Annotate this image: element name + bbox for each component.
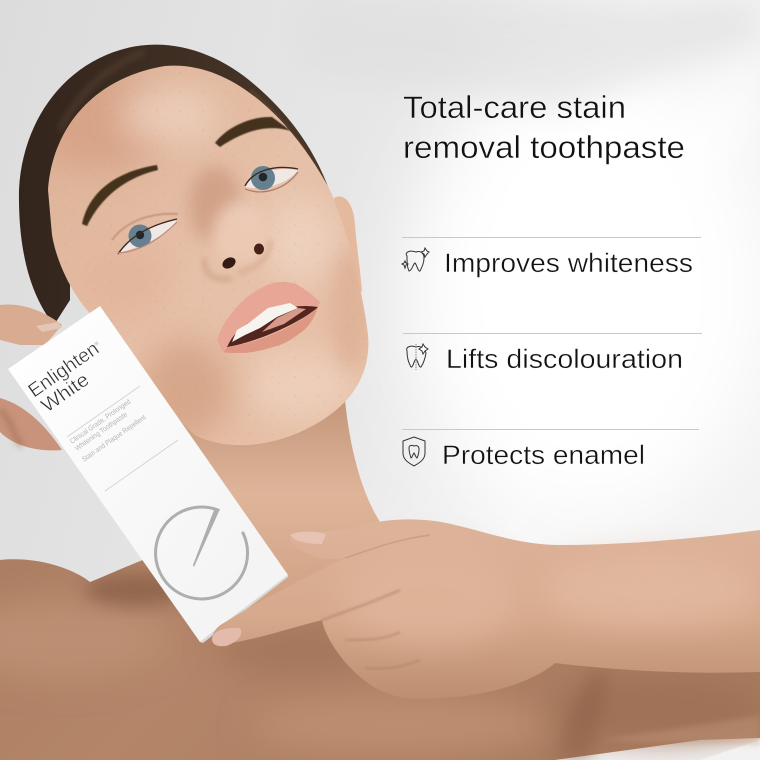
benefit: improves whiteness bbox=[402, 238, 701, 278]
ear bbox=[334, 197, 362, 292]
neck bbox=[130, 400, 382, 610]
icon: shield with tooth bbox=[403, 437, 425, 466]
benefit: lifts discolouration: Lifts discolouration bbox=[446, 344, 683, 374]
product box bbox=[8, 306, 288, 643]
pointing hand and arm bbox=[212, 519, 760, 699]
heading: Total-care stain bbox=[403, 89, 626, 125]
nose bbox=[205, 216, 270, 279]
benefit: improves whiteness: Improves whiteness bbox=[444, 248, 693, 278]
heading: removal toothpaste bbox=[403, 129, 685, 165]
heading bbox=[403, 89, 685, 165]
hair bbox=[19, 45, 330, 325]
face bbox=[48, 66, 368, 445]
box descriptor: Whitening Toothpaste bbox=[73, 410, 129, 453]
eyebrow right bbox=[215, 117, 291, 147]
eyelid crease left bbox=[112, 214, 178, 240]
product box: ® bbox=[93, 340, 100, 348]
box title: White bbox=[37, 369, 93, 417]
benefit: protects enamel: Protects enamel bbox=[442, 440, 645, 470]
benefit: lifts discolouration bbox=[403, 334, 702, 374]
hand behind box: left fingers bbox=[0, 305, 62, 450]
icon: half-shaded tooth bbox=[407, 344, 428, 370]
box logo bbox=[156, 507, 248, 599]
icon: tooth with sparkles bbox=[402, 248, 429, 271]
lips bbox=[217, 282, 320, 353]
fingernails bbox=[212, 628, 241, 646]
box descriptor: Clinical Grade, Prolonged bbox=[68, 397, 132, 446]
box title: Enlighten bbox=[24, 338, 103, 402]
box descriptor: Stain and Plaque Repellent bbox=[80, 413, 147, 464]
eyebrow left bbox=[82, 165, 158, 226]
benefit: protects enamel bbox=[402, 430, 699, 470]
eye left bbox=[118, 219, 177, 254]
eye right bbox=[245, 166, 298, 192]
box descriptor bbox=[68, 397, 147, 464]
body: shoulders and chest bbox=[0, 559, 760, 760]
